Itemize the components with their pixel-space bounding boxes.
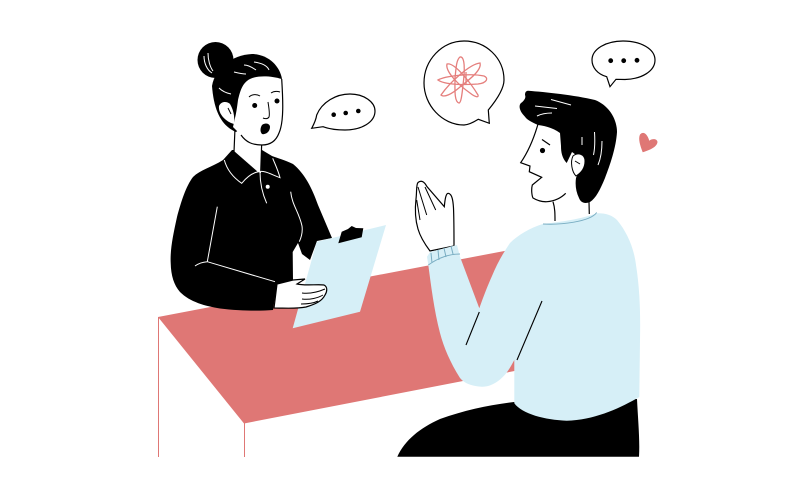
speech bubble: idea atom [424,41,504,125]
woman [171,42,332,311]
woman face [219,76,283,145]
icon: atom scribble [438,57,487,103]
table [158,248,530,457]
woman collar [195,158,302,282]
man head [521,120,590,222]
man trousers [397,399,639,457]
man sweater [427,213,640,421]
man [397,91,640,457]
man hand [415,181,454,251]
speech bubble: man [592,41,655,87]
sweater cuff and collar [428,212,597,265]
woman neck [234,125,262,173]
man ear [572,154,585,176]
sweater folds [466,301,542,360]
woman button [266,185,270,189]
speech bubble: woman [312,94,375,130]
icon: heart [639,133,658,152]
woman hair and bun [198,42,282,132]
clipboard [293,225,386,328]
woman hand [274,279,327,308]
man hair [520,91,617,203]
woman body [171,150,332,311]
